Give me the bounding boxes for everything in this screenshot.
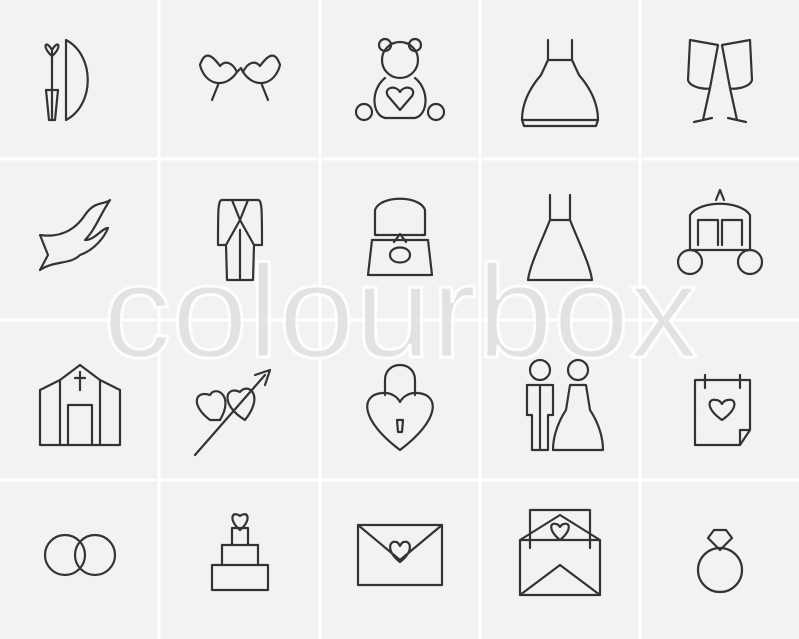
icon: church bbox=[40, 365, 120, 445]
icon: carriage bbox=[678, 190, 762, 274]
icon: ring box bbox=[368, 199, 432, 275]
icon: hearts with arrow bbox=[195, 370, 270, 455]
icon: heart padlock bbox=[367, 365, 433, 450]
icon: kissing doves bbox=[200, 56, 280, 100]
icon: wedding cake bbox=[212, 514, 268, 590]
icon: wedding dress bbox=[522, 40, 598, 126]
icon: dove bbox=[40, 200, 110, 270]
icon: arrow and bow bbox=[46, 40, 88, 120]
icon: tuxedo bbox=[218, 200, 262, 280]
icon: teddy bear bbox=[356, 39, 444, 120]
watermark text: colourbox bbox=[103, 238, 698, 385]
icon: champagne glasses bbox=[688, 40, 752, 122]
icon: bride and groom bbox=[527, 360, 603, 450]
icon: long dress bbox=[528, 195, 592, 280]
icon: open envelope letter bbox=[520, 510, 600, 595]
icon: calendar heart bbox=[695, 375, 750, 445]
icon: two rings bbox=[45, 535, 115, 575]
icon: envelope heart bbox=[358, 525, 442, 585]
icon: diamond ring bbox=[698, 530, 742, 592]
